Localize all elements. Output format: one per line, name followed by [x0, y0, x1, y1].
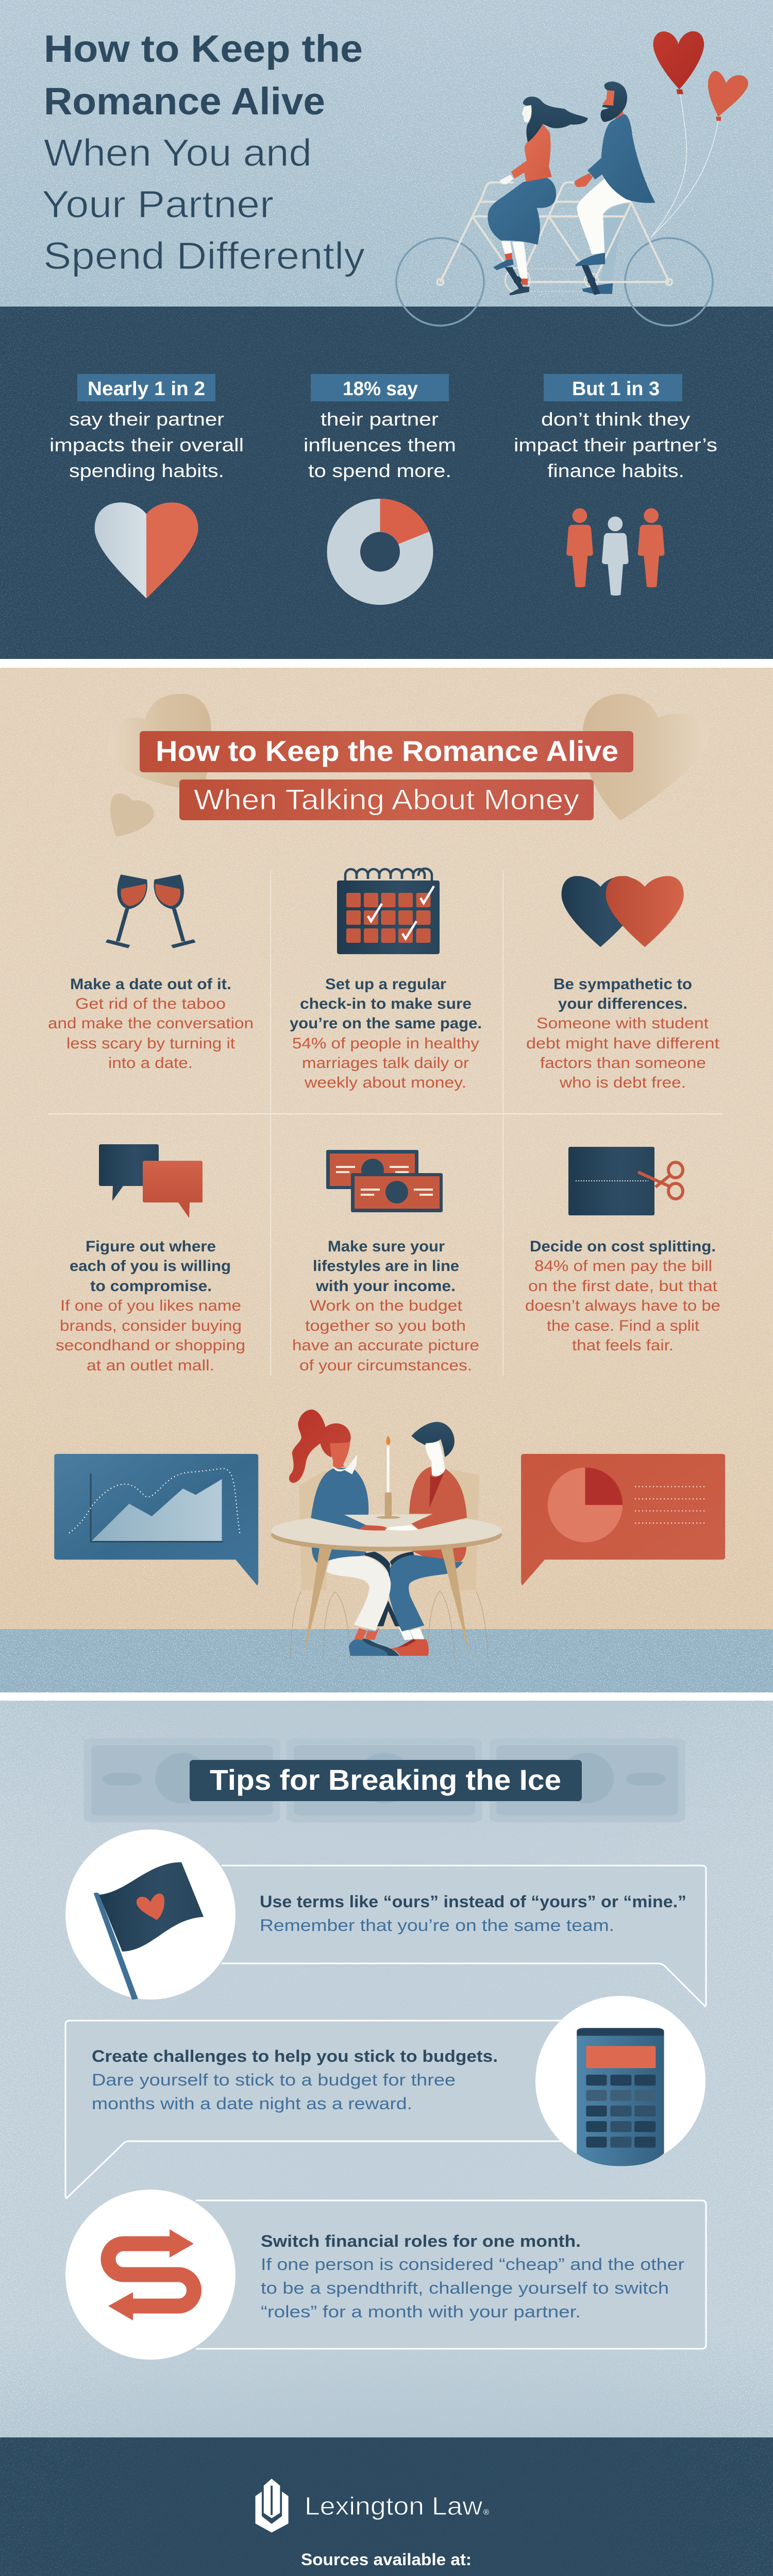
text block: figure out where: each of you is willing	[70, 1258, 231, 1275]
woman: skirt	[488, 178, 556, 245]
illustration: couple at dinner table	[271, 1410, 502, 1659]
speech bubble: pie chart	[521, 1454, 725, 1586]
icon: half-filled heart	[95, 502, 198, 599]
icon: tandem riders and bicycle frame	[437, 81, 672, 295]
shoes	[349, 1639, 429, 1656]
ghost money banner behind heading	[84, 1738, 685, 1822]
section background: tips	[0, 1701, 773, 2438]
icon: calendar	[337, 869, 440, 954]
woman: flowing hair	[523, 96, 588, 142]
man: shirt opening	[429, 1472, 444, 1508]
bicycle frame	[440, 182, 669, 282]
text block: be sympathetic: who is debt free.	[559, 1074, 686, 1091]
callout: tip 1 outline	[222, 1866, 706, 2006]
text block: be sympathetic: factors than someone	[540, 1055, 706, 1072]
right glass	[154, 874, 196, 948]
chart: donut 18 percent	[327, 499, 433, 605]
bicycle chain	[527, 269, 589, 292]
text block: make a date out of it: less scary by turning it	[66, 1035, 236, 1052]
title: Romance Alive	[44, 80, 325, 123]
text block: make sure your lifestyles: lifestyles are in line	[313, 1258, 459, 1275]
text block: tip 1: Remember that you’re on the same team.	[260, 1916, 614, 1935]
man: head and hair	[411, 1422, 455, 1476]
man: hand	[575, 173, 593, 187]
text block: make a date out of it	[48, 976, 254, 1072]
text block: decide on cost splitting: the case. Find a split	[547, 1317, 700, 1334]
text block: tip 3	[261, 2232, 684, 2321]
icon: two overlapping hearts	[562, 876, 684, 947]
text block: make a date out of it: Get rid of the taboo	[75, 995, 226, 1012]
bicycle cranks and pedals	[505, 265, 600, 295]
circle: tip 1	[65, 1829, 236, 1999]
heading: when talking about money	[179, 779, 594, 820]
text block: figure out where: Figure out where	[86, 1238, 216, 1255]
circle: tip 2	[535, 1996, 705, 2166]
icon: bicycle wheels	[396, 238, 713, 326]
text block: tip 2: months with a date night as a reward.	[92, 2094, 412, 2113]
back bill	[326, 1150, 418, 1189]
man: front shoe	[575, 253, 605, 266]
text block: tip 3: to be a spendthrift, challenge yourself to switch	[261, 2279, 669, 2297]
text block: set up a regular check-in: you’re on the same page.	[290, 1015, 482, 1032]
man: far leg	[600, 204, 630, 283]
text block: be sympathetic	[526, 976, 720, 1091]
circle: tip 3	[65, 2190, 236, 2360]
text block: decide on cost splitting	[525, 1238, 720, 1354]
woman: upper body	[311, 1467, 368, 1529]
woman: face	[522, 105, 532, 123]
calendar rings	[345, 869, 432, 882]
man: hair and beard	[600, 81, 627, 122]
grid lines	[48, 870, 722, 1376]
icon: Lexington Law logo	[256, 2479, 289, 2533]
speech bubble: line chart	[54, 1454, 258, 1586]
text block: stat 1: impacts their overall	[49, 434, 244, 455]
waistbands	[365, 1552, 414, 1578]
icon: wallet with scissors	[568, 1147, 683, 1215]
man: far shoe	[582, 283, 613, 294]
text block: stat 3	[514, 409, 717, 481]
logo wordmark: Lexington Law	[305, 2493, 483, 2520]
balloon: small heart	[708, 71, 748, 121]
text block: figure out where: If one of you likes name	[60, 1297, 241, 1314]
text block: stat 3: impact their partner’s	[514, 434, 717, 455]
stat badge: nearly 1 in 2	[77, 374, 215, 401]
text block: tip 2: Create challenges to help you stick to budgets.	[92, 2047, 498, 2065]
icon: flag with heart	[94, 1862, 204, 1999]
text block: make a date out of it: Make a date out of it.	[70, 976, 231, 993]
text block: tip 3: Switch financial roles for one month.	[261, 2232, 581, 2250]
text block: make sure your lifestyles: Make sure your	[328, 1238, 445, 1255]
text block: stat 1: say their partner	[69, 409, 224, 430]
text block: tip 1	[260, 1892, 686, 1935]
text block: be sympathetic: your differences.	[558, 995, 687, 1012]
trousers inner shadow	[377, 1601, 400, 1626]
icon: speech bubbles	[99, 1144, 203, 1218]
section background: floor	[0, 1629, 773, 1692]
illustration: speech bubbles with charts	[54, 1454, 725, 1586]
section background: header sky	[0, 0, 773, 307]
text block: stat 1	[49, 409, 244, 481]
text block: decide on cost splitting: 84% of men pay the bill	[534, 1258, 712, 1275]
text block: be sympathetic: Be sympathetic to	[553, 976, 692, 993]
icon: three people	[566, 509, 664, 596]
heading: tips for breaking the ice: Tips for Breaking the Ice	[210, 1764, 561, 1796]
lower torsos	[312, 1547, 466, 1564]
text block: figure out where: to compromise.	[90, 1278, 212, 1295]
text block: figure out where: brands, consider buying	[60, 1317, 242, 1334]
woman: jumper	[511, 124, 552, 182]
icon: money bills	[326, 1150, 443, 1212]
stat badge: 18% say: 18% say	[343, 378, 418, 400]
man: coat	[587, 114, 656, 203]
text block: set up a regular check-in	[290, 976, 482, 1091]
text block: make sure your lifestyles	[292, 1238, 479, 1374]
calendar cells	[346, 893, 431, 943]
title: Your Partner	[42, 183, 274, 226]
text block: be sympathetic: Someone with student	[536, 1015, 709, 1032]
balloon: large heart	[653, 31, 704, 94]
man: jeans	[388, 1555, 463, 1632]
title	[42, 27, 365, 277]
stat badge: but 1 in 3: But 1 in 3	[572, 378, 660, 400]
woman: legs and socks	[501, 241, 528, 285]
panel: statistics	[49, 374, 717, 605]
woman: shoes	[493, 259, 529, 295]
heading: tips for breaking the ice	[190, 1760, 582, 1801]
section background: footer	[0, 2437, 773, 2576]
hands	[359, 1525, 418, 1531]
stat badge: nearly 1 in 2: Nearly 1 in 2	[88, 378, 205, 400]
text block: tip 3: “roles” for a month with your partner.	[261, 2302, 581, 2321]
text block: stat 2: influences them	[304, 434, 456, 455]
section background: beige wall	[0, 668, 773, 1630]
man: upper body	[409, 1467, 467, 1529]
text block: stat 1: spending habits.	[69, 460, 224, 481]
callout: tip 2 outline	[65, 2021, 567, 2198]
front bill	[351, 1173, 443, 1212]
icon: wine glasses	[106, 874, 196, 948]
heading: when talking about money: When Talking About Money	[194, 783, 579, 816]
woman: hand	[500, 175, 514, 184]
stat badge: 18% say	[311, 374, 449, 401]
heading: how to keep the romance alive: How to Keep the Romance Alive	[156, 735, 618, 767]
text block: make sure your lifestyles: together so you both	[305, 1317, 466, 1334]
text block: tip 1: Use terms like “ours” instead of “yours” or “mine.”	[260, 1892, 686, 1911]
text block: set up a regular check-in: marriages talk daily or	[302, 1055, 469, 1072]
panel: tips for breaking the ice	[65, 1738, 706, 2360]
text block: figure out where	[56, 1238, 245, 1374]
text block: decide on cost splitting: that feels fair.	[572, 1337, 674, 1354]
illustration: couple on tandem bicycle with balloons	[396, 31, 748, 326]
title: How to Keep the	[44, 27, 363, 70]
text block: decide on cost splitting: on the first date, but that	[528, 1278, 718, 1295]
man: neck	[615, 110, 624, 121]
text block: decide on cost splitting: doesn’t always have to be	[525, 1297, 720, 1314]
text block: make a date out of it: and make the conversation	[48, 1015, 254, 1032]
text block: stat 3: finance habits.	[547, 460, 684, 481]
text block: tip 3: If one person is considered “cheap” and the other	[261, 2255, 684, 2274]
table top	[271, 1514, 502, 1551]
text block: make sure your lifestyles: have an accurate picture	[292, 1337, 479, 1354]
woman: white trousers	[326, 1556, 391, 1631]
icon: switching arrows	[108, 2229, 194, 2320]
text block: set up a regular check-in: Set up a regular	[325, 976, 446, 993]
candle	[376, 1436, 400, 1519]
text block: decide on cost splitting: Decide on cost splitting.	[530, 1238, 716, 1255]
text block: tip 2: Dare yourself to stick to a budget for three	[92, 2071, 456, 2089]
text block: make sure your lifestyles: Work on the budget	[310, 1297, 463, 1314]
man: white trousers	[577, 179, 631, 254]
socks	[354, 1627, 424, 1640]
text block: make sure your lifestyles: with your income.	[315, 1278, 456, 1295]
footer	[86, 2479, 687, 2576]
text block: set up a regular check-in: 54% of people in healthy	[292, 1035, 479, 1052]
table legs	[304, 1547, 469, 1655]
calendar check marks	[368, 886, 434, 939]
chairs	[290, 1469, 488, 1659]
man: face	[602, 90, 615, 107]
callout: tip 3 outline	[196, 2200, 706, 2349]
logo registered mark: ®	[483, 2508, 489, 2517]
text block: stat 3: don’t think they	[541, 409, 690, 430]
section background: statistics band	[0, 307, 773, 659]
text block: stat 2: their partner	[321, 409, 439, 430]
text block: figure out where: secondhand or shopping	[56, 1337, 245, 1354]
woman: head, collar and hair	[289, 1410, 357, 1483]
balloon strings	[651, 94, 718, 238]
text block: be sympathetic: debt might have different	[526, 1035, 720, 1052]
text block: set up a regular check-in: weekly about money.	[304, 1074, 466, 1091]
icon: balloons	[651, 31, 748, 238]
decorative background hearts	[108, 694, 709, 837]
text block: make a date out of it: into a date.	[108, 1055, 193, 1072]
left glass	[106, 874, 147, 948]
calendar body	[337, 880, 440, 954]
text: sources heading: Sources available at:	[301, 2550, 472, 2569]
bicycle hubs and chainrings	[437, 268, 672, 293]
text block: figure out where: at an outlet mall.	[87, 1357, 214, 1374]
stat badge: but 1 in 3	[544, 374, 682, 401]
text block: make sure your lifestyles: of your circumstances.	[299, 1357, 472, 1374]
text block: set up a regular check-in: check-in to make sure	[300, 995, 472, 1012]
icon: calculator	[577, 2028, 664, 2166]
text block: stat 2	[304, 409, 456, 481]
title: Spend Differently	[43, 234, 365, 277]
text block: tip 2	[92, 2047, 498, 2113]
title: When You and	[44, 131, 312, 174]
text block: stat 2: to spend more.	[308, 460, 451, 481]
